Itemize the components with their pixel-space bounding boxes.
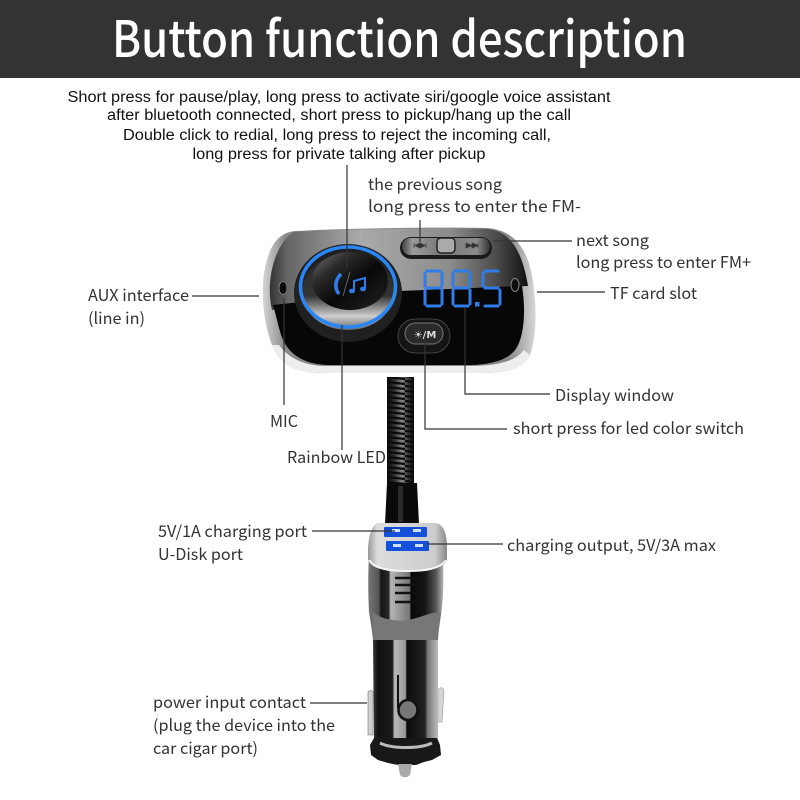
vent slots: [395, 578, 423, 602]
USB port upper: [384, 527, 427, 537]
slider switch: [398, 675, 418, 720]
text block: multifunction button description: long press for private talking after pickup: [192, 146, 486, 163]
label: power input contact: [153, 689, 335, 759]
label: charging port: [158, 518, 307, 565]
label: Rainbow LED: Rainbow LED: [287, 444, 386, 468]
label: previous song: the previous song: [368, 171, 502, 195]
label: charging port: 5V/1A charging port: [158, 518, 307, 542]
label: AUX interface: AUX interface: [88, 282, 189, 306]
leader lines: [192, 165, 605, 703]
contact left: [368, 690, 373, 735]
AUX port hole: [279, 282, 287, 294]
LED and mode button: ☀/M: [414, 330, 436, 341]
title banner: [0, 0, 800, 78]
text block: multifunction button description: [68, 89, 611, 163]
gooseneck: [385, 377, 419, 524]
label: next song: [576, 227, 751, 273]
label: charging output: charging output, 5V/3A max: [507, 532, 716, 556]
label: previous song: [368, 171, 581, 217]
previous and next song rocker button: [400, 237, 492, 259]
text block: multifunction button description: Double click to redial, long press to reject the incoming call,: [123, 127, 551, 144]
label: MIC: MIC: [270, 408, 298, 432]
LED and mode button: [398, 319, 450, 353]
text block: multifunction button description: after bluetooth connected, short press to pickup/hang up the call: [107, 107, 571, 124]
multifunction knob with blue ring: [294, 244, 402, 342]
USB car charger: [368, 523, 447, 777]
label: AUX interface: [88, 282, 189, 329]
USB port lower: [386, 541, 429, 551]
label: power input contact: (plug the device into the: [153, 712, 335, 736]
icon: phone and music: [336, 272, 366, 296]
label: next song: long press to enter FM+: [576, 249, 751, 273]
label: power input contact: car cigar port): [153, 735, 258, 759]
label: charging port: U-Disk port: [158, 541, 243, 565]
contact right: [438, 688, 444, 722]
title: Button function description: [112, 0, 687, 72]
label: LED color switch: short press for led color switch: [513, 415, 744, 439]
label: previous song: long press to enter the FM-: [368, 193, 581, 217]
text block: multifunction button description: Short press for pause/play, long press to activate siri/google voice assistant: [68, 89, 611, 106]
display: 88.5: [425, 271, 500, 306]
waist highlight: [372, 612, 441, 640]
label: power input contact: power input contact: [153, 689, 306, 713]
glossy upper panel: [270, 229, 528, 310]
TF card slot hole: [511, 278, 519, 292]
label: TF card slot: TF card slot: [610, 280, 697, 304]
device: FM transmitter head: [263, 228, 536, 373]
tip contact: [398, 764, 412, 777]
label: Display window: Display window: [555, 382, 674, 406]
knurled base: [370, 738, 441, 765]
label: next song: next song: [576, 227, 649, 251]
USB top cap: [368, 523, 447, 571]
charger body: [368, 555, 443, 643]
label: AUX interface: (line in): [88, 305, 145, 329]
